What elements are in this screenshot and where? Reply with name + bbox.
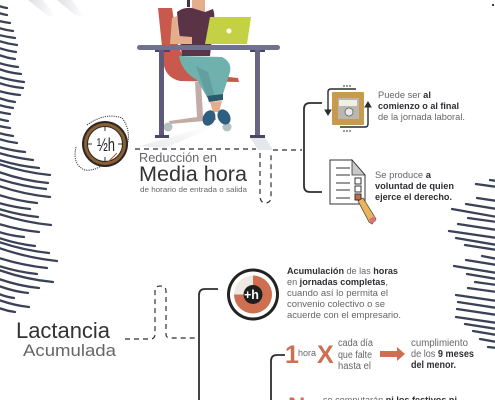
text: cumplimiento de los 9 meses del menor [411, 338, 474, 371]
connector: dashed loop [260, 153, 271, 203]
text: accumulation explanation [287, 266, 401, 320]
text: accumulation explanation: en jornadas completas, [287, 277, 388, 287]
text: cumplimiento de los 9 meses del menor: del menor. [411, 360, 456, 371]
floor shadow [140, 127, 214, 148]
heading: Lactancia Acumulada: Lactancia [16, 318, 111, 343]
heading: Reducción en Media hora: Media hora [139, 162, 247, 186]
text: cada día que falte hasta el [338, 338, 373, 372]
icon: document and pencil [330, 160, 376, 224]
connector: dashed loop from Lactancia heading [125, 286, 198, 339]
text: accumulation explanation: Acumulación de las horas [287, 266, 398, 276]
decoration: right radial stripes [449, 180, 495, 348]
text: cada día que falte hasta el: que falte [338, 350, 372, 361]
text: accumulation explanation: convenio colectivo o se [287, 299, 385, 309]
text: cada día que falte hasta el: hasta el [338, 361, 371, 372]
decoration: left radial stripes [0, 6, 57, 312]
text: cada día que falte hasta el: cada día [338, 338, 373, 349]
formula: 1 hora X: 1 [285, 341, 299, 369]
heading: Reducción en Media hora [139, 151, 248, 194]
text: a voluntad de quien ejerce el derecho: voluntad de quien [375, 181, 454, 191]
text: al comienzo o al final: de la jornada laboral. [378, 112, 465, 122]
chair back and seat [158, 8, 239, 82]
heading: Lactancia Acumulada: Acumulada [23, 341, 117, 360]
bracket: upper options [304, 103, 322, 192]
bracket: lower detail [271, 355, 285, 400]
text: al comienzo o al final [378, 90, 465, 122]
shoes [200, 108, 218, 128]
text: no se computarán festivos [288, 393, 457, 400]
laptop [205, 17, 251, 44]
icon: half hour clock [75, 116, 128, 170]
neck and hair [192, 0, 205, 12]
heading: Reducción en Media hora: Reducción en [139, 151, 217, 165]
text: cumplimiento de los 9 meses del menor: de los 9 meses [411, 349, 474, 360]
formula: 1 hora X: hora [298, 348, 316, 358]
shirt [177, 8, 214, 56]
chair stem and base [169, 82, 216, 124]
text: a voluntad de quien ejerce el derecho: ejerce el derecho. [375, 192, 452, 202]
trouser hem [207, 94, 223, 102]
text: a voluntad de quien ejerce el derecho: Se produce a [375, 170, 432, 180]
text: al comienzo o al final: Puede ser al [378, 90, 431, 100]
legs [179, 56, 230, 97]
ankles [210, 101, 222, 112]
arm [170, 16, 192, 44]
decoration: top grey stripes [28, 0, 494, 17]
bracket: lower options [199, 289, 218, 400]
text: accumulation explanation: cuando así lo permita el [287, 288, 388, 298]
illustration: woman working at a desk [137, 0, 280, 150]
heading: Reducción en Media hora: de horario de entrada o salida [140, 185, 248, 194]
icon: half hour clock: ½h [97, 135, 115, 155]
text: accumulation explanation: acuerde con el empresario. [287, 310, 401, 320]
arrow: formula to result [380, 347, 405, 361]
formula: 1 hora X: X [317, 341, 334, 369]
text: cumplimiento de los 9 meses del menor: cumplimiento [411, 338, 468, 349]
icon: calendar with arrows [325, 86, 371, 131]
text: al comienzo o al final: comienzo o al final [378, 101, 459, 111]
text: a voluntad de quien ejerce el derecho [375, 170, 454, 202]
desk [137, 45, 280, 50]
connector: dashed line from clock title [135, 149, 302, 150]
icon: accumulated hours timer [227, 268, 279, 320]
icon: accumulated hours timer: +h [244, 288, 259, 302]
heading: Lactancia Acumulada [16, 318, 117, 360]
formula: 1 hora X [285, 341, 334, 369]
